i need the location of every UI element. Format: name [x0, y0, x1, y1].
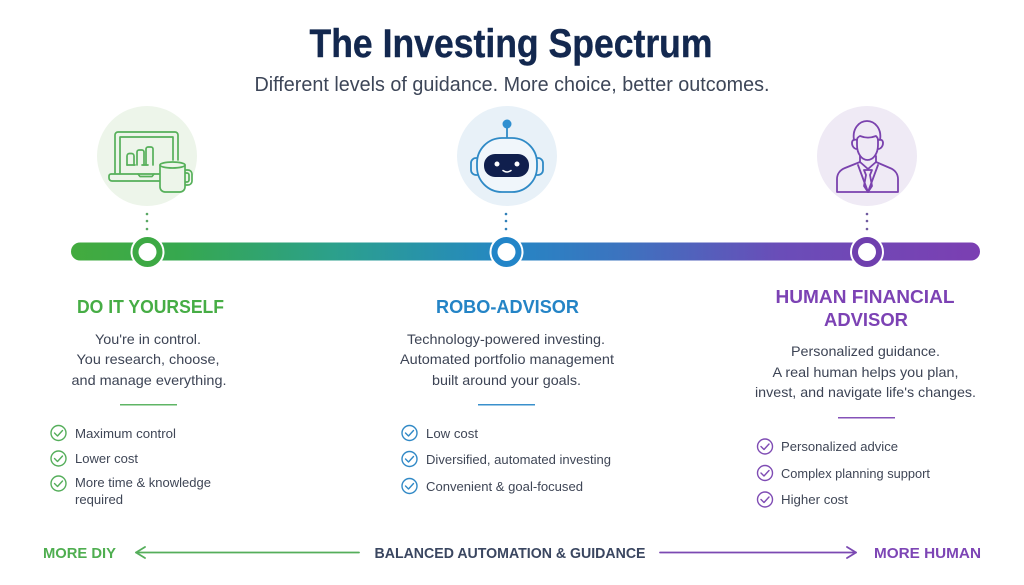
- spectrum bar: [71, 242, 980, 260]
- panel: human financial advisor: [755, 287, 976, 507]
- checklist: Personalized advice: [781, 440, 898, 454]
- marker: human advisor: [850, 235, 884, 269]
- connector dots: [866, 213, 868, 230]
- description: Automated portfolio management: [400, 351, 614, 367]
- description: and manage everything.: [72, 372, 227, 388]
- checklist: [402, 426, 611, 494]
- panel: robo-advisor: [400, 297, 614, 494]
- description: Personalized guidance.: [791, 343, 940, 359]
- subtitle: Different levels of guidance. More choice, better outcomes.: [254, 74, 770, 96]
- checklist: Low cost: [426, 427, 479, 441]
- heading: [776, 287, 954, 330]
- checklist: More time & knowledge: [75, 476, 211, 490]
- marker: do it yourself: [130, 235, 164, 269]
- icon: robot: [457, 106, 557, 206]
- connector dots: [505, 213, 507, 230]
- heading: HUMAN FINANCIAL: [776, 287, 954, 307]
- checklist: Lower cost: [75, 452, 139, 466]
- label: balanced automation and guidance: BALANCED AUTOMATION & GUIDANCE: [374, 546, 646, 562]
- heading: ROBO-ADVISOR: [436, 297, 579, 317]
- icon: advisor person: [817, 106, 917, 206]
- connector dots: [146, 213, 148, 230]
- description: [72, 331, 227, 388]
- marker: robo-advisor: [490, 235, 524, 269]
- description: A real human helps you plan,: [772, 364, 958, 380]
- heading: ADVISOR: [824, 310, 908, 330]
- description: [755, 343, 976, 400]
- description: invest, and navigate life's changes.: [755, 384, 976, 400]
- description: [400, 331, 614, 388]
- checklist: Complex planning support: [781, 467, 931, 481]
- checklist: required: [75, 493, 123, 507]
- checklist: [51, 426, 211, 507]
- checklist: Convenient & goal-focused: [426, 480, 583, 494]
- heading: DO IT YOURSELF: [77, 297, 224, 317]
- label: more diy: MORE DIY: [43, 545, 116, 562]
- description: You research, choose,: [76, 351, 220, 367]
- label: more human: MORE HUMAN: [874, 545, 981, 562]
- icon: laptop and coffee mug: [97, 106, 197, 206]
- checklist: Maximum control: [75, 427, 176, 441]
- arrow: toward diy: [136, 547, 359, 558]
- checklist: Diversified, automated investing: [426, 453, 611, 467]
- checklist: Higher cost: [781, 493, 849, 507]
- arrow: toward human: [660, 547, 856, 558]
- checklist: [758, 439, 931, 507]
- description: built around your goals.: [432, 372, 581, 388]
- description: Technology-powered investing.: [407, 331, 605, 347]
- panel: do it yourself: [51, 297, 227, 507]
- description: You're in control.: [95, 331, 201, 347]
- title: The Investing Spectrum: [310, 22, 712, 66]
